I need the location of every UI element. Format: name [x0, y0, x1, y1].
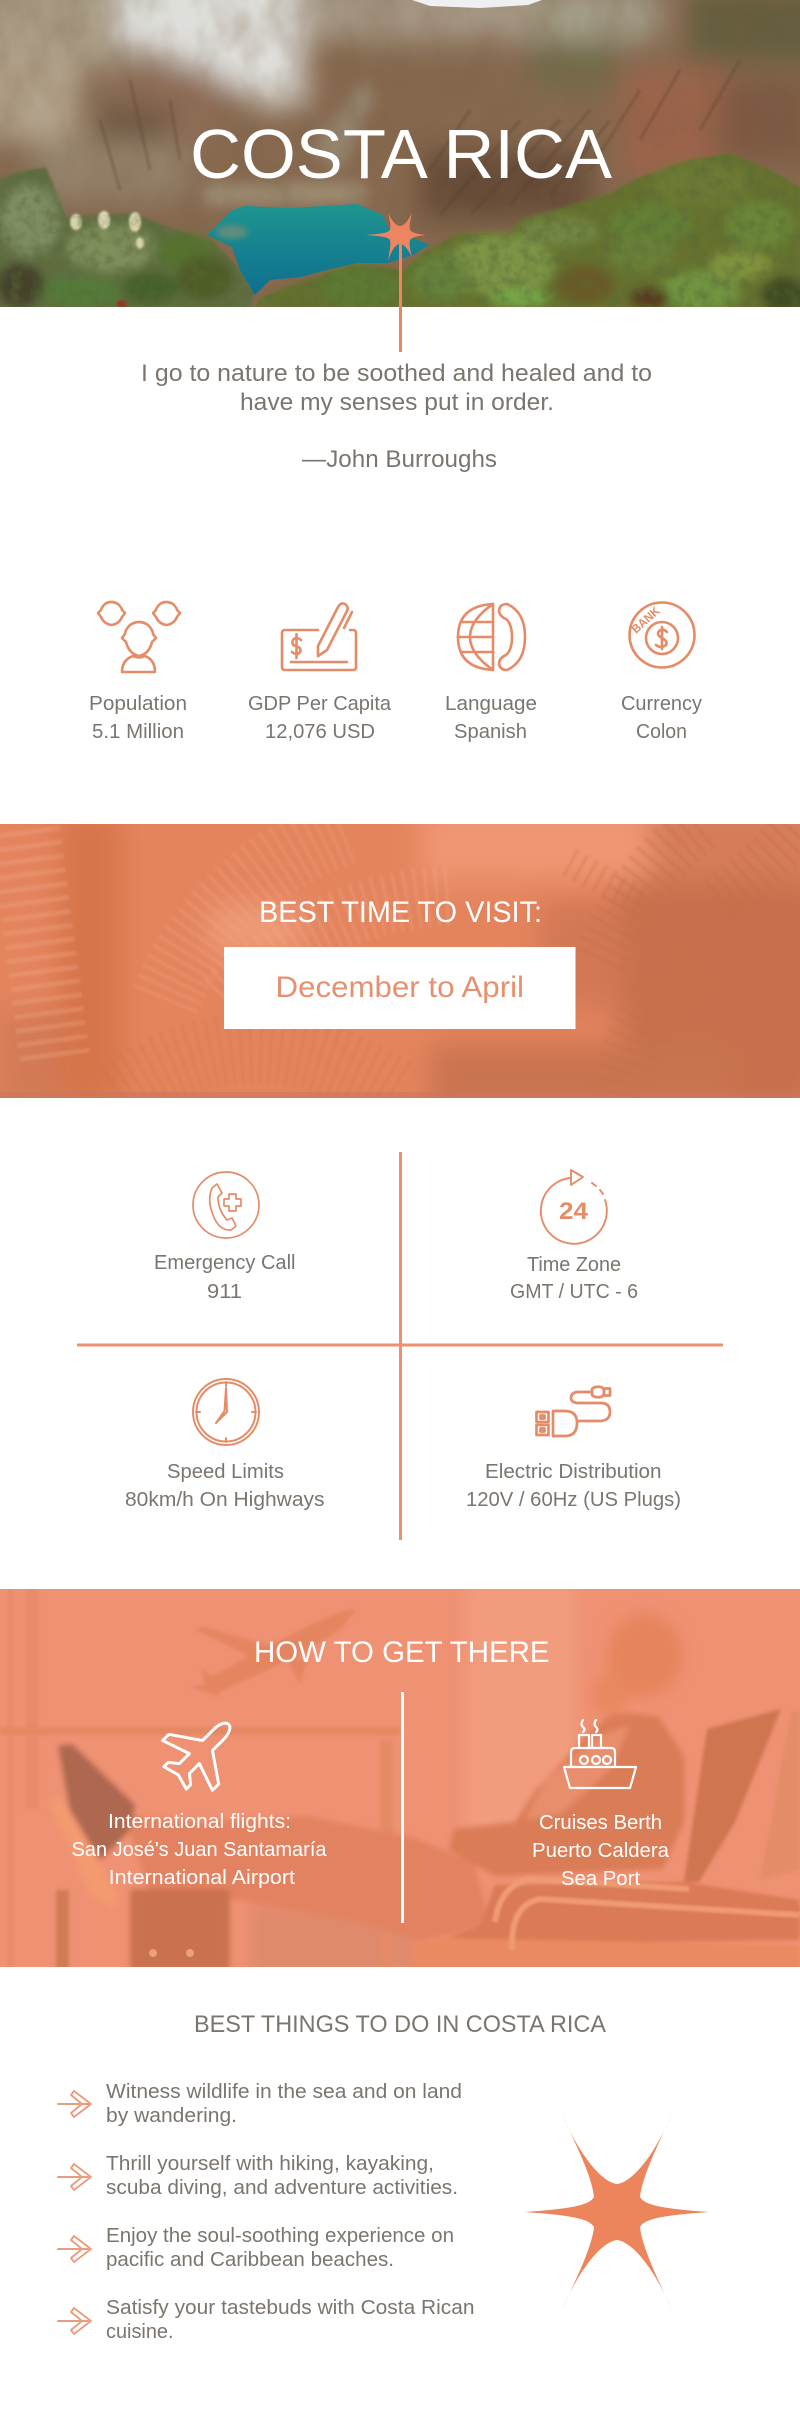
icon: cruise ship: [564, 1720, 636, 1788]
text: cruises berth: [532, 1812, 670, 1890]
cliff streaks: [100, 60, 740, 215]
icon: airplane: [150, 1699, 254, 1803]
text: international flights: San José's Juan Santamaría: [72, 1839, 327, 1861]
fact: language: [445, 693, 537, 743]
icon: currency bank coin: BANK: [629, 604, 663, 636]
quote attribution: —John Burroughs: [302, 446, 497, 473]
heading: how to get there: HOW TO GET THERE: [254, 1636, 550, 1669]
title: COSTA RICA: [190, 115, 612, 193]
fact: emergency call: [154, 1252, 296, 1303]
item: beaches: Enjoy the soul-soothing experience on: [106, 2225, 454, 2247]
icon: arrow 4: [58, 2308, 91, 2334]
item: wildlife: Witness wildlife in the sea and on land: [106, 2081, 462, 2103]
right vegetation: [255, 153, 800, 314]
item: wildlife: [106, 2081, 462, 2127]
foliage texture: [0, 150, 800, 307]
icon: language globe and phone: [458, 604, 525, 670]
fact: language: Spanish: [454, 721, 527, 743]
icon: gdp cheque: [282, 603, 356, 670]
item: beaches: [106, 2225, 454, 2271]
item: adventure: scuba diving, and adventure activities.: [106, 2177, 458, 2199]
fact: time zone: GMT / UTC - 6: [510, 1281, 638, 1303]
fact: electric distribution: [466, 1461, 681, 1511]
fact: currency: Currency: [621, 693, 702, 715]
fact: gdp: 12,076 USD: [265, 721, 375, 743]
plane silhouette: [212, 1610, 355, 1692]
fact: speed limits: 80km/h On Highways: [125, 1489, 324, 1511]
fact: time zone: [510, 1254, 638, 1303]
callout: december to april: December to April: [276, 971, 524, 1004]
panel: practical info grid: [77, 1152, 723, 1540]
fact: language: Language: [445, 693, 537, 715]
torso: [449, 1712, 684, 1876]
fact: time zone: Time Zone: [527, 1254, 621, 1276]
panel: country facts: [89, 602, 702, 743]
item: adventure: Thrill yourself with hiking, kayaking,: [106, 2153, 434, 2175]
fact: population: [89, 693, 187, 743]
icon: arrow 2: [58, 2164, 91, 2190]
fact: emergency call: Emergency Call: [154, 1252, 296, 1274]
icon: arrow 3: [58, 2236, 91, 2262]
text: international flights: [72, 1811, 327, 1889]
left vegetation: [0, 167, 255, 320]
icon: emergency call: [193, 1172, 259, 1238]
fact: population: 5.1 Million: [92, 721, 184, 743]
fact: speed limits: [125, 1461, 324, 1511]
fact: currency: [621, 693, 702, 743]
icon: speed limit clock: [193, 1379, 259, 1445]
panel: how to get there photo: [0, 1585, 800, 1975]
text: cruises berth: Cruises Berth: [539, 1812, 662, 1834]
fact: currency: Colon: [636, 721, 687, 743]
fact: gdp: GDP Per Capita: [248, 693, 392, 715]
quote: I go to nature to be soothed and healed and to: [141, 360, 652, 387]
fact: emergency call: 911: [207, 1281, 242, 1303]
fact: speed limits: Speed Limits: [167, 1461, 284, 1483]
icon: time zone 24: 24: [559, 1198, 589, 1225]
icon: large star: [525, 2114, 709, 2310]
icon: hero star and connector line: [365, 213, 426, 352]
icon: time zone 24: [541, 1170, 607, 1244]
sole: [55, 1802, 112, 1902]
item: wildlife: by wandering.: [106, 2105, 237, 2127]
icon: electric plug: [536, 1387, 610, 1436]
fact: gdp: [248, 693, 392, 743]
text: cruises berth: Puerto Caldera: [532, 1840, 670, 1862]
callout: december to april: [224, 947, 576, 1029]
sky opening: [412, 0, 542, 8]
head: [607, 1613, 683, 1697]
lower leg: [125, 1815, 490, 1942]
suitcase: [130, 1889, 230, 1971]
item: cuisine: [106, 2297, 474, 2343]
chair back: [684, 1709, 781, 1882]
item: cuisine: Satisfy your tastebuds with Costa Rican: [106, 2297, 474, 2319]
heading: best things to do: BEST THINGS TO DO IN COSTA RICA: [194, 2011, 606, 2038]
lake: [207, 204, 429, 295]
seat: [430, 1882, 800, 1945]
text: cruises berth: Sea Port: [561, 1868, 640, 1890]
item: adventure: [106, 2153, 458, 2199]
item: cuisine: cuisine.: [106, 2321, 174, 2343]
fact: electric distribution: 120V / 60Hz (US Plugs): [466, 1489, 681, 1511]
panel: best time to visit: [0, 810, 800, 1110]
icon: arrow 1: [58, 2091, 91, 2117]
quote: have my senses put in order.: [240, 389, 554, 416]
fact: population: Population: [89, 693, 187, 715]
heading: best time to visit: BEST TIME TO VISIT:: [259, 896, 542, 929]
icon: currency bank coin: [629, 602, 694, 668]
divider: how to get there: [401, 1692, 404, 1923]
quote: [141, 360, 652, 473]
fact: electric distribution: Electric Distribution: [485, 1461, 662, 1483]
icon: population: [98, 602, 180, 672]
panel: hero photo: [0, 0, 800, 320]
text: international flights: International Airport: [109, 1867, 295, 1889]
panel: things to do list: [58, 2081, 474, 2343]
shoe: [58, 1744, 135, 1860]
text: international flights: International flights:: [108, 1811, 291, 1833]
item: beaches: pacific and Caribbean beaches.: [106, 2249, 394, 2271]
